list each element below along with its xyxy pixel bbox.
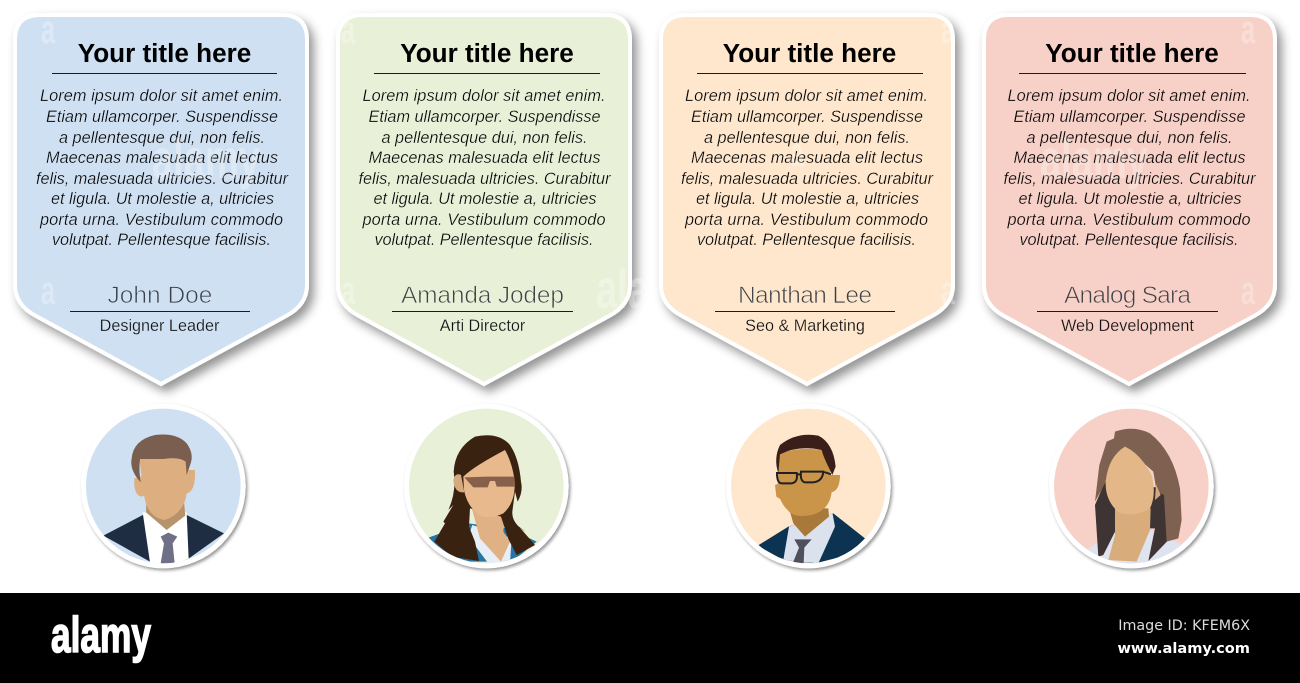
body text: Lorem ipsum dolor sit amet enim. — [685, 87, 928, 105]
role: Seo & Marketing — [745, 317, 865, 335]
body text: felis, malesuada ultricies. Curabitur — [358, 170, 611, 188]
card shape: pink — [984, 15, 1275, 384]
role: Designer Leader — [100, 317, 220, 335]
heading: Your title here — [723, 38, 896, 68]
watermark letters: alamy — [596, 257, 704, 320]
body text: a pellentesque dui, non felis. — [704, 129, 910, 147]
watermark letters: alamy — [152, 127, 260, 190]
website: www.alamy.com — [1117, 640, 1250, 657]
body text: porta urna. Vestibulum commodo — [1006, 211, 1250, 229]
watermark letters: a — [1241, 8, 1255, 52]
watermark letters — [1040, 8, 1255, 313]
body text: volutpat. Pellentesque facilisis. — [374, 231, 594, 249]
card shape: blue — [15, 15, 307, 384]
watermark letters — [790, 8, 955, 313]
watermark letters: a — [790, 131, 804, 175]
heading: Your title here — [78, 38, 251, 68]
name: Nanthan Lee — [738, 282, 872, 309]
body text: et ligula. Ut molestie a, ultricies — [374, 190, 596, 208]
body text: Etiam ullamcorper. Suspendisse — [1014, 108, 1246, 126]
role: Web Development — [1061, 317, 1194, 335]
watermark letters: a — [41, 8, 55, 52]
body text: et ligula. Ut molestie a, ultricies — [1018, 190, 1242, 208]
body text: felis, malesuada ultricies. Curabitur — [681, 170, 934, 188]
body text: felis, malesuada ultricies. Curabitur — [1004, 170, 1256, 188]
body text — [358, 87, 611, 249]
body text: a pellentesque dui, non felis. — [59, 129, 265, 147]
watermark letters: a — [941, 8, 955, 52]
watermark letters: a — [941, 269, 955, 313]
watermark letters: a — [341, 8, 355, 52]
body text: Maecenas malesuada elit lectus — [368, 149, 600, 167]
panel: Analog Sara card — [984, 8, 1275, 384]
body text: Lorem ipsum dolor sit amet enim. — [1008, 87, 1250, 105]
body text: Maecenas malesuada elit lectus — [1014, 149, 1246, 167]
heading: Your title here — [1045, 38, 1219, 68]
name: Amanda Jodep — [401, 282, 564, 309]
body text: Etiam ullamcorper. Suspendisse — [691, 108, 923, 126]
image id: Image ID: KFEM6X — [1118, 618, 1250, 634]
alamy logo: alamy — [51, 607, 151, 663]
footer bar — [0, 593, 1300, 683]
avatar: woman with long brown hair — [1049, 404, 1214, 568]
body text — [681, 87, 934, 249]
body text: et ligula. Ut molestie a, ultricies — [51, 190, 274, 208]
panel: Nanthan Lee card — [661, 8, 955, 384]
body text: felis, malesuada ultricies. Curabitur — [36, 170, 289, 188]
body text — [36, 87, 289, 249]
name: Analog Sara — [1064, 282, 1191, 309]
avatar: man with glasses — [726, 404, 891, 568]
body text: Etiam ullamcorper. Suspendisse — [368, 108, 600, 126]
body text: volutpat. Pellentesque facilisis. — [697, 231, 916, 249]
body text: volutpat. Pellentesque facilisis. — [52, 231, 271, 249]
watermark letters: a — [1241, 269, 1255, 313]
name: John Doe — [108, 282, 212, 309]
avatar: woman with sunglasses — [404, 404, 569, 568]
card shape: green — [338, 15, 630, 384]
body text: porta urna. Vestibulum commodo — [684, 211, 928, 229]
body text: Lorem ipsum dolor sit amet enim. — [40, 87, 283, 105]
watermark letters — [41, 8, 260, 313]
body text: Maecenas malesuada elit lectus — [46, 149, 278, 167]
panel: John Doe card — [15, 8, 307, 384]
body text: Lorem ipsum dolor sit amet enim. — [362, 87, 606, 105]
heading: Your title here — [400, 38, 574, 68]
body text: volutpat. Pellentesque facilisis. — [1020, 231, 1238, 249]
avatar: man in dark suit — [81, 404, 246, 568]
body text: Maecenas malesuada elit lectus — [691, 149, 923, 167]
body text — [1004, 87, 1256, 249]
body text: porta urna. Vestibulum commodo — [362, 211, 606, 229]
body text: Etiam ullamcorper. Suspendisse — [46, 108, 278, 126]
body text: porta urna. Vestibulum commodo — [39, 211, 283, 229]
watermark letters: alamy — [1040, 127, 1148, 190]
card shape: orange — [661, 15, 953, 384]
body text: a pellentesque dui, non felis. — [382, 129, 588, 147]
watermark letters — [341, 8, 704, 320]
panel: Amanda Jodep card — [338, 8, 704, 384]
role: Arti Director — [440, 317, 526, 335]
watermark letters: a — [41, 269, 55, 313]
body text: et ligula. Ut molestie a, ultricies — [696, 190, 919, 208]
body text: a pellentesque dui, non felis. — [1026, 129, 1232, 147]
watermark letters: a — [341, 269, 355, 313]
